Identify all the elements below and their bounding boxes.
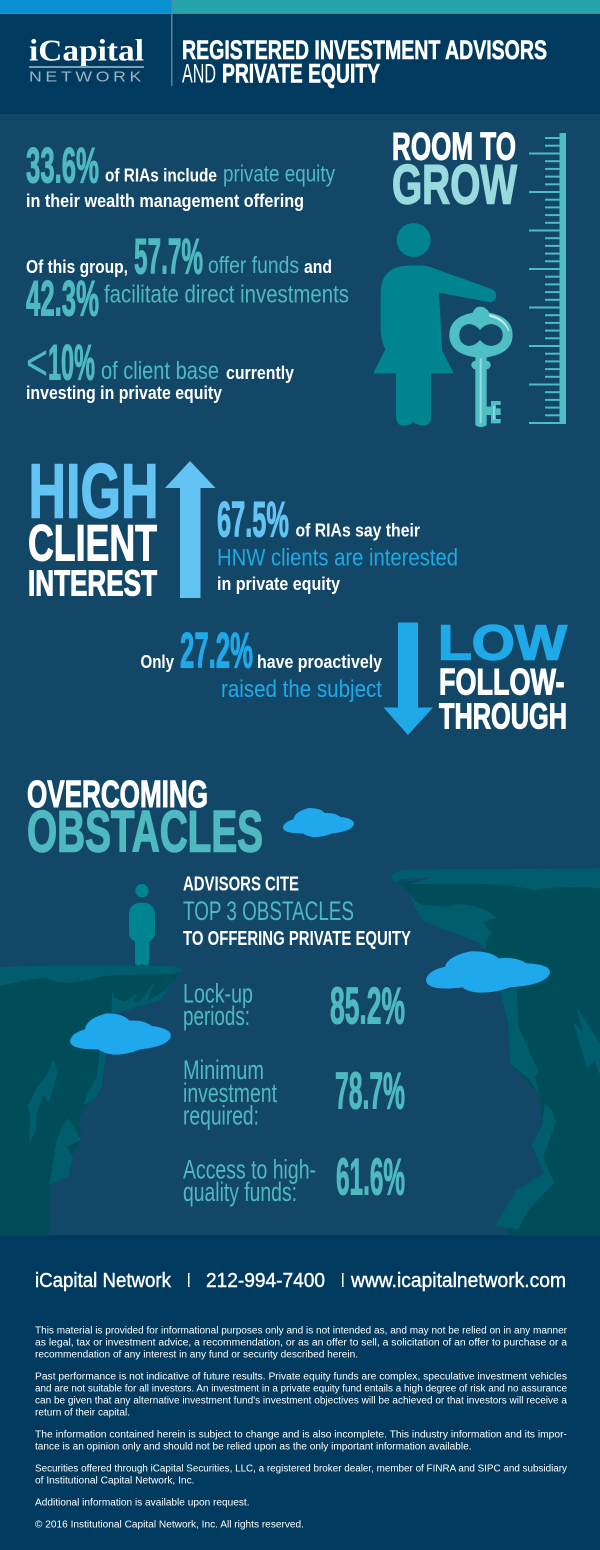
stat: 67.5% clients interested: 67.5% xyxy=(217,492,289,548)
obstacle: access to funds xyxy=(183,1148,405,1207)
heading: high client interest: INTEREST xyxy=(28,562,157,604)
illustration: left cliff xyxy=(0,965,182,1235)
heading: room to grow: GROW xyxy=(392,152,517,216)
disclaimer text: The information contained herein is subject to change and is also incomplete. This industry information and its impor- xyxy=(35,1430,567,1440)
text: advisors cite top 3 obstacles: ADVISORS CITE xyxy=(183,874,299,896)
icon: cloud right xyxy=(426,951,550,993)
obstacle: lock-up periods: 85.2% xyxy=(330,978,405,1036)
icon: person on cliff xyxy=(129,884,155,965)
ruler xyxy=(529,133,566,424)
title xyxy=(182,35,547,88)
obstacle: lock-up periods: Lock-up xyxy=(183,978,253,1008)
stat: under 10% of client base: of client base xyxy=(101,357,219,385)
contact line: www.icapitalnetwork.com xyxy=(350,1270,566,1292)
illustration: right cliff xyxy=(392,868,600,1235)
text: advisors cite top 3 obstacles xyxy=(183,874,411,950)
contact line xyxy=(35,1270,566,1292)
infographic: 61.6% xyxy=(336,1148,405,1206)
arrow: up xyxy=(165,461,216,598)
disclaimer text: © 2016 Institutional Capital Network, Inc. All rights reserved. xyxy=(35,1520,304,1530)
disclaimer text: This material is provided for informational purposes only and is not intended as, and may not be relied on in any manner xyxy=(35,1326,568,1336)
disclaimer text: Additional information is available upon request. xyxy=(35,1498,250,1508)
obstacle: access to funds: Access to high- xyxy=(183,1154,316,1184)
heading: room to grow xyxy=(392,126,517,216)
disclaimer text: Past performance is not indicative of future results. Private equity funds are complex, speculative investment vehicles xyxy=(35,1372,567,1382)
stat: 27.2% proactively raised xyxy=(140,622,382,703)
stat: 57.7% funds and 42.3% direct: Of this group, xyxy=(26,257,128,277)
disclaimer text: can be given that any alternative investment fund's investment objectives will be achieved or that investors will receive a xyxy=(35,1396,567,1406)
stat: 67.5% clients interested: of RIAs say their xyxy=(296,520,420,540)
heading: low follow-through xyxy=(438,616,568,736)
icon: cloud top xyxy=(283,808,354,837)
disclaimer text: of Institutional Capital Network, Inc. xyxy=(35,1476,195,1486)
stat: 67.5% clients interested: HNW clients are interested xyxy=(217,544,458,572)
obstacle: lock-up periods xyxy=(183,978,405,1036)
icon: woman figure xyxy=(373,223,496,426)
logo: iCapital Network: NETWORK xyxy=(29,70,145,86)
icon: cloud left xyxy=(70,1013,171,1055)
heading: high client interest: CLIENT xyxy=(28,514,157,572)
obstacle: minimum investment xyxy=(183,1055,405,1130)
stat: 67.5% clients interested xyxy=(217,492,458,594)
stat: 57.7% funds and 42.3% direct: 42.3% xyxy=(26,270,99,326)
obstacle: minimum investment: Minimum xyxy=(183,1055,264,1085)
stat: 27.2% proactively raised: raised the subject xyxy=(221,676,382,703)
stat: under 10% of client base: currently xyxy=(226,363,294,383)
heading: overcoming obstacles: OBSTACLES xyxy=(27,800,263,864)
icon: key xyxy=(449,307,513,427)
stat: under 10% of client base: investing in private equity xyxy=(26,383,222,403)
stat: 57.7% funds and 42.3% direct xyxy=(26,228,349,326)
stat: 33.6% include private equity: of RIAs include xyxy=(105,166,217,186)
obstacle: lock-up periods: periods: xyxy=(183,1001,250,1031)
disclaimer text: tance is an opinion only and should not be relied upon as the only important information available. xyxy=(35,1442,472,1452)
stat: 57.7% funds and 42.3% direct: 57.7% xyxy=(134,228,203,284)
heading: high client interest: HIGH xyxy=(28,448,158,534)
stat: 67.5% clients interested: in private equity xyxy=(217,574,340,594)
heading: overcoming obstacles: OVERCOMING xyxy=(27,774,208,816)
text: advisors cite top 3 obstacles: TOP 3 OBSTACLES xyxy=(183,896,354,926)
text: advisors cite top 3 obstacles: TO OFFERING PRIVATE EQUITY xyxy=(183,928,411,950)
title: PRIVATE EQUITY xyxy=(222,58,380,88)
stat: under 10% of client base: < xyxy=(26,334,48,390)
header band xyxy=(0,0,600,114)
obstacle: access to funds: quality funds: xyxy=(183,1177,297,1207)
stat: 33.6% include private equity: 33.6% xyxy=(26,138,99,194)
stat: 33.6% include private equity: in their wealth management offering xyxy=(26,191,304,211)
heading: room to grow: ROOM TO xyxy=(392,126,516,168)
stat: 27.2% proactively raised: 27.2% xyxy=(180,622,253,678)
stat: under 10% of client base xyxy=(26,334,294,403)
disclaimer text: and are not suitable for all investors. An investment in a private equity fund entails a high degree of risk and no assurance xyxy=(35,1384,567,1394)
arrow: down xyxy=(384,622,433,735)
obstacle: minimum investment: investment xyxy=(183,1078,277,1108)
disclaimer text xyxy=(35,1326,568,1530)
disclaimer text: recommendation of any interest in any fund or security described herein. xyxy=(35,1350,358,1360)
contact line: iCapital Network xyxy=(35,1270,172,1292)
logo: iCapital Network: iCapital xyxy=(29,32,144,68)
stat: 27.2% proactively raised: have proactively xyxy=(257,652,382,672)
heading: low follow-through: LOW xyxy=(438,616,568,670)
disclaimer text: return of their capital. xyxy=(35,1408,130,1418)
stat: 57.7% funds and 42.3% direct: facilitate direct investments xyxy=(104,280,349,308)
heading: overcoming obstacles xyxy=(27,774,263,864)
stat: 33.6% include private equity: private equity xyxy=(223,160,335,186)
disclaimer text: as legal, tax or investment advice, a recommendation, or as an offer to sell, a solicitation of an offer to purchase or a xyxy=(35,1338,567,1348)
logo: iCapital Network xyxy=(29,32,145,86)
obstacle: minimum investment: required: xyxy=(183,1100,259,1130)
infographic: 78.7% xyxy=(335,1062,405,1120)
stat: 33.6% include private equity xyxy=(26,138,335,211)
contact line: 212-994-7400 xyxy=(206,1270,325,1292)
footer band xyxy=(0,1235,600,1550)
stat: 27.2% proactively raised: Only xyxy=(140,652,174,672)
heading: high client interest xyxy=(28,448,158,604)
disclaimer text: Securities offered through iCapital Securities, LLC, a registered broker dealer, member of FINRA and SIPC and subsidiary xyxy=(35,1464,567,1474)
stat: 57.7% funds and 42.3% direct: offer funds xyxy=(208,252,299,278)
title: AND xyxy=(182,58,216,88)
stat: under 10% of client base: 10% xyxy=(48,334,95,390)
stat: 57.7% funds and 42.3% direct: and xyxy=(304,257,332,277)
